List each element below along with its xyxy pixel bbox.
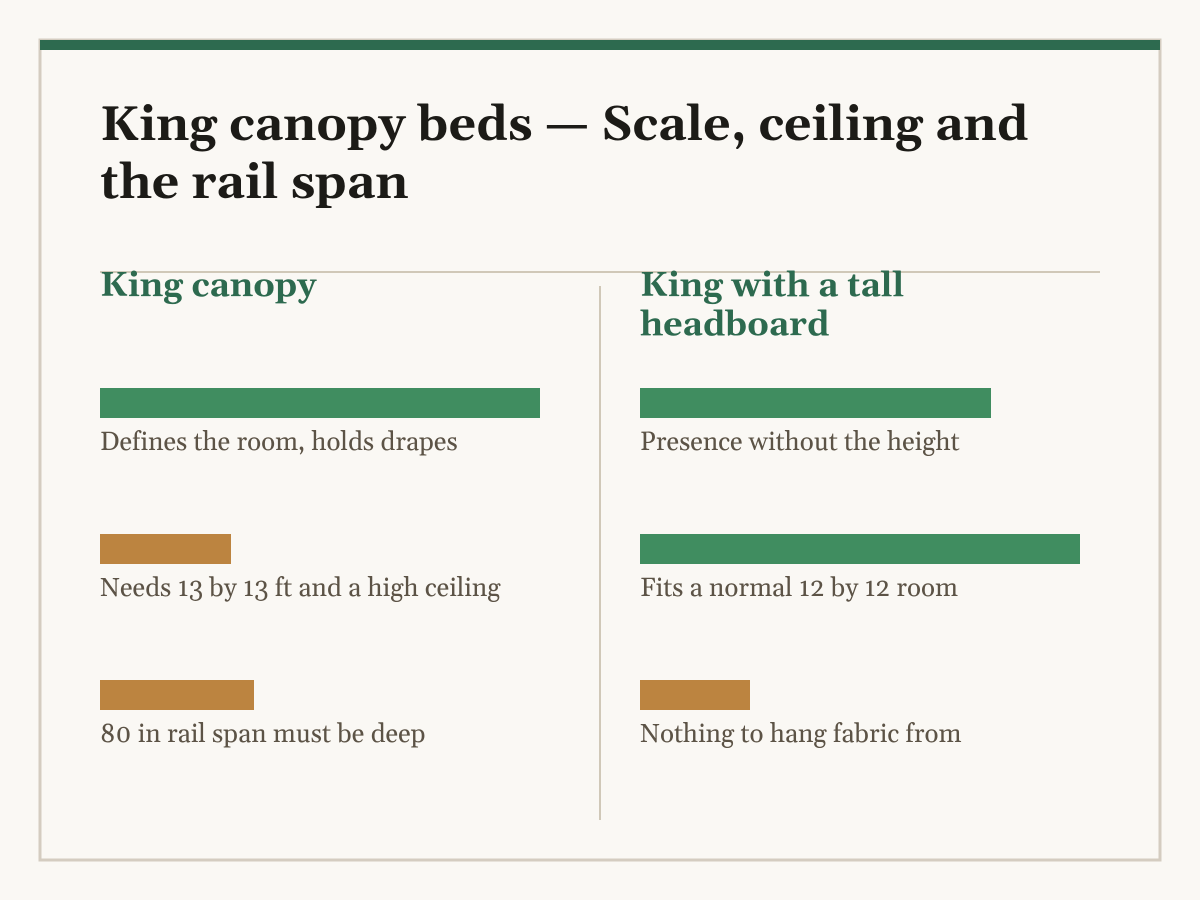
- bar: rail span: 80 in rail span must be deep: [100, 718, 426, 751]
- top accent bar: [40, 40, 1160, 50]
- title: King canopy beds — Scale, ceiling and: [100, 96, 1028, 157]
- bar: presence: Presence without the height: [640, 426, 960, 459]
- heading: King with a tall headboard: headboard: [640, 303, 829, 347]
- bar: defines the room: Defines the room, holds drapes: [100, 426, 458, 459]
- bar: fits a normal room: Fits a normal 12 by 12 room: [640, 572, 958, 605]
- heading: King with a tall headboard: King with a tall: [640, 264, 904, 308]
- heading: King canopy: King canopy: [100, 264, 316, 308]
- bar: presence: [640, 388, 991, 459]
- panel: King with a tall headboard: [640, 264, 1080, 751]
- panel: King canopy: [100, 264, 540, 751]
- bar: defines the room: [100, 388, 540, 459]
- title: the rail span: [100, 154, 408, 215]
- bar: fits a normal room: [640, 534, 1080, 605]
- title: [100, 96, 1028, 215]
- bar: nothing to hang from: Nothing to hang fabric from: [640, 718, 961, 751]
- bar: needs space: [100, 534, 501, 605]
- bar: rail span: [100, 680, 426, 751]
- bar: needs space: Needs 13 by 13 ft and a high ceiling: [100, 572, 501, 605]
- bar: nothing to hang from: [640, 680, 962, 751]
- heading: King with a tall headboard: [640, 264, 904, 347]
